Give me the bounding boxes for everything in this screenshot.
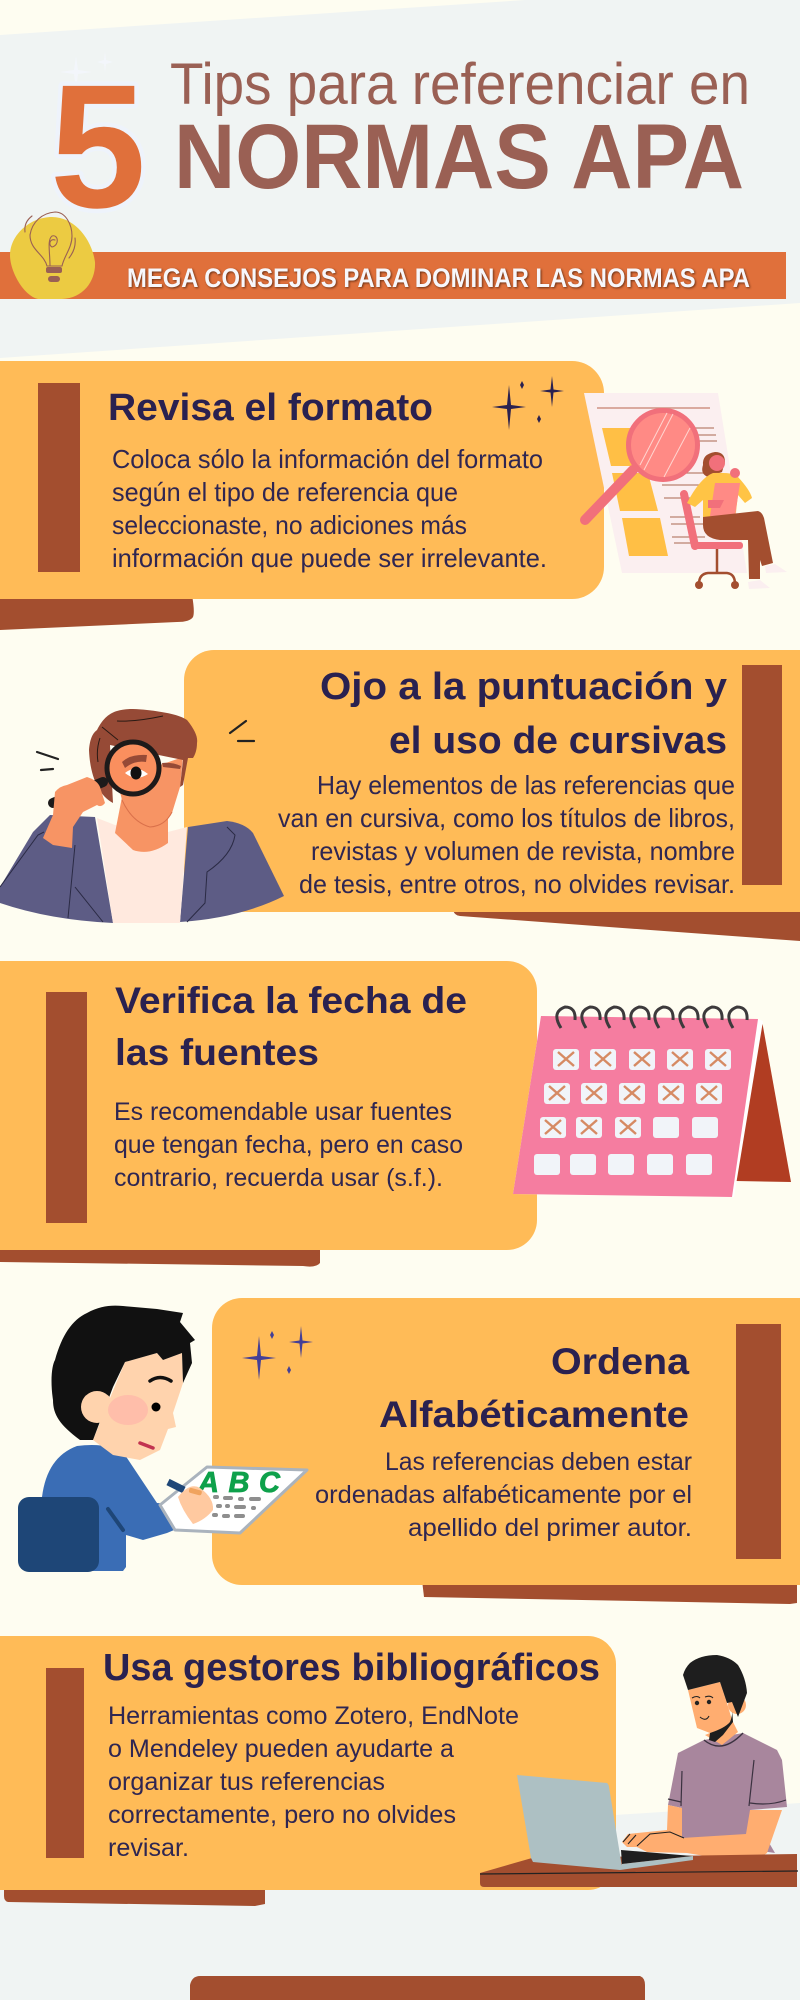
heading: Usa gestores bibliográficos	[103, 1647, 600, 1689]
body text: según el tipo de referencia que	[112, 477, 458, 507]
body text: de tesis, entre otros, no olvides revisar.	[299, 869, 735, 899]
body text	[114, 1098, 463, 1192]
body text: Herramientas como Zotero, EndNote	[108, 1702, 519, 1730]
body text: revistas y volumen de revista, nombre	[311, 836, 735, 866]
body text: que tengan fecha, pero en caso	[114, 1131, 463, 1159]
strip under card 2	[453, 908, 800, 941]
calendar cells	[534, 1049, 731, 1175]
accent bar	[46, 992, 87, 1223]
heading	[379, 1341, 689, 1435]
hair	[52, 1306, 195, 1440]
body text: o Mendeley pueden ayudarte a	[108, 1735, 454, 1763]
tablet: ABC	[197, 1467, 281, 1499]
illustration: man with laptop	[480, 1655, 798, 1887]
calendar spiral	[557, 1007, 747, 1028]
strip under card 5	[4, 1885, 265, 1906]
body text: organizar tus referencias	[108, 1768, 385, 1796]
title line 2: NORMAS APA	[174, 106, 744, 208]
heading	[115, 980, 467, 1073]
face	[93, 1353, 183, 1460]
panel: ojo a la puntuacion	[184, 650, 800, 912]
accent bar	[736, 1324, 781, 1559]
body text	[108, 1702, 519, 1862]
body text: Es recomendable usar fuentes	[114, 1098, 452, 1126]
body text: información que puede ser irrelevante.	[112, 543, 547, 573]
panel: ordena alfabeticamente	[212, 1298, 800, 1585]
body text	[315, 1448, 692, 1542]
heading: las fuentes	[115, 1032, 319, 1073]
strip under card 3	[0, 1250, 320, 1267]
heading: Verifica la fecha de	[115, 980, 467, 1021]
body text: contrario, recuerda usar (s.f.).	[114, 1164, 443, 1192]
body text: Hay elementos de las referencias que	[317, 770, 735, 800]
table	[480, 1854, 797, 1887]
illustration: boy writing on tablet	[18, 1306, 307, 1572]
accent bar	[38, 383, 80, 572]
tablet	[160, 1467, 307, 1533]
header background	[0, 0, 800, 358]
hair	[683, 1655, 747, 1717]
body text: apellido del primer autor.	[408, 1514, 692, 1542]
motion dashes	[37, 721, 254, 770]
strip under card 1	[0, 595, 194, 630]
calendar crosses	[545, 1052, 726, 1134]
hand	[43, 777, 105, 848]
illustration: man with magnifying glass	[0, 709, 284, 923]
body text: ordenadas alfabéticamente por el	[315, 1481, 692, 1509]
body text	[278, 770, 735, 899]
heading: Revisa el formato	[108, 387, 433, 429]
laptop	[621, 1850, 692, 1864]
number five: 5	[50, 49, 146, 245]
heading: Alfabéticamente	[379, 1394, 689, 1435]
illustration: calendar	[513, 1007, 791, 1197]
icon: light bulb	[10, 212, 95, 299]
heading	[320, 666, 727, 762]
bottom bar	[190, 1976, 645, 2000]
body text: Coloca sólo la información del formato	[112, 444, 543, 474]
magnifier	[53, 742, 181, 803]
illustration: document and magnifier	[584, 393, 787, 589]
icon: sparkles	[492, 376, 564, 430]
heading: el uso de cursivas	[389, 720, 727, 762]
heading: Ordena	[551, 1341, 689, 1382]
person on chair	[684, 452, 787, 589]
panel: revisa el formato	[0, 361, 604, 599]
shirt	[668, 1733, 787, 1853]
banner	[0, 252, 786, 299]
body text	[112, 444, 547, 573]
title line 1: Tips para referenciar en	[170, 52, 750, 117]
body text: Las referencias deben estar	[385, 1448, 692, 1476]
icon: sparkles	[242, 1326, 313, 1380]
body text: correctamente, pero no olvides	[108, 1801, 456, 1829]
footer background	[0, 1803, 800, 2000]
panel: verifica la fecha	[0, 961, 537, 1250]
neck and face	[688, 1682, 738, 1745]
body text: van en cursiva, como los títulos de libros,	[278, 803, 735, 833]
body text: revisar.	[108, 1834, 189, 1862]
arm	[622, 1805, 782, 1860]
heading: Ojo a la puntuación y	[320, 666, 727, 708]
body text: seleccionaste, no adiciones más	[112, 510, 467, 540]
accent bar	[742, 665, 782, 885]
accent bar	[46, 1668, 84, 1858]
panel: usa gestores	[0, 1636, 616, 1890]
strip under card 4	[422, 1580, 797, 1604]
